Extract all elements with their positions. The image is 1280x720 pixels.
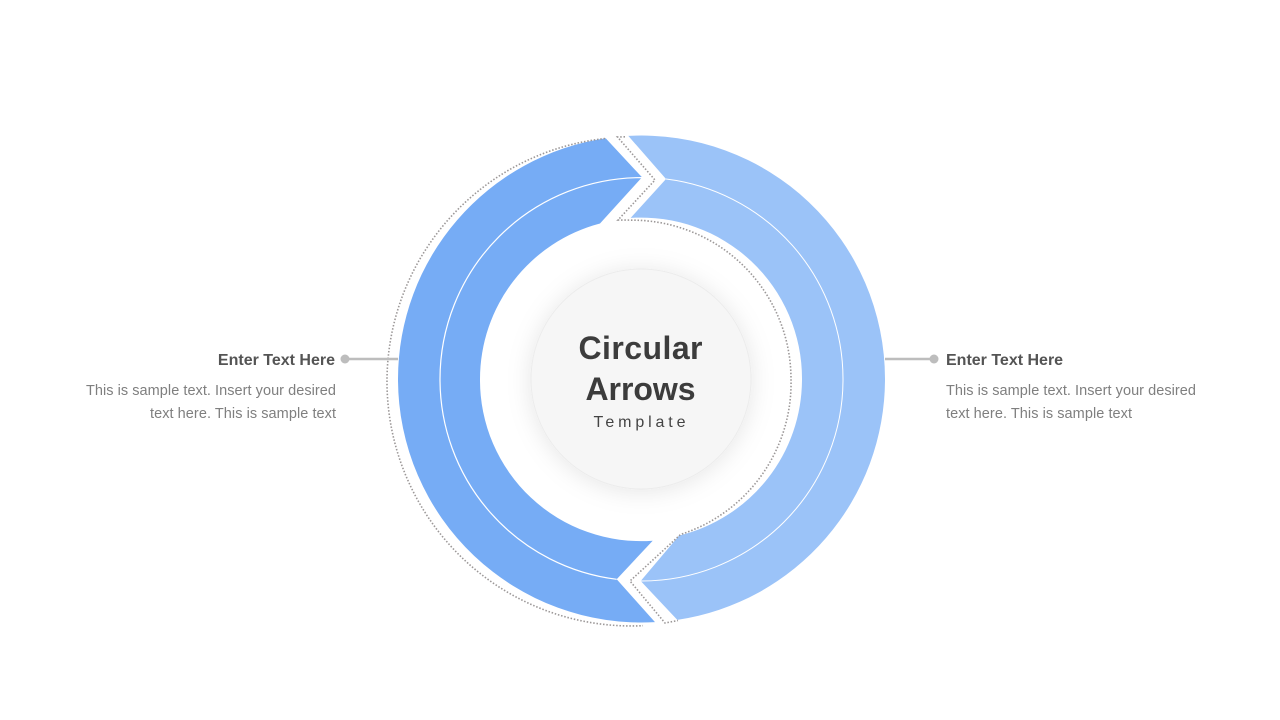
right text block: This is sample text. Insert your desired — [946, 383, 1196, 399]
left text block: text here. This is sample text — [150, 406, 336, 422]
title: Arrows — [586, 371, 696, 407]
left arrow: dark blue — [398, 138, 655, 622]
right connector — [885, 354, 938, 364]
left text block — [86, 352, 336, 422]
right text block: Enter Text Here — [946, 352, 1063, 369]
left text block: Enter Text Here — [218, 352, 335, 369]
dotted outline: left arrow — [387, 138, 643, 626]
title: Circular — [578, 330, 702, 366]
right arrow: light blue — [628, 136, 885, 620]
left text block: This is sample text. Insert your desired — [86, 383, 336, 399]
title — [578, 330, 702, 407]
right text block — [946, 352, 1196, 422]
center circle — [531, 269, 751, 489]
right text block: text here. This is sample text — [946, 406, 1132, 422]
dotted outline: right arrow — [618, 137, 791, 623]
subtitle: Template — [594, 414, 686, 431]
left connector — [340, 354, 398, 364]
